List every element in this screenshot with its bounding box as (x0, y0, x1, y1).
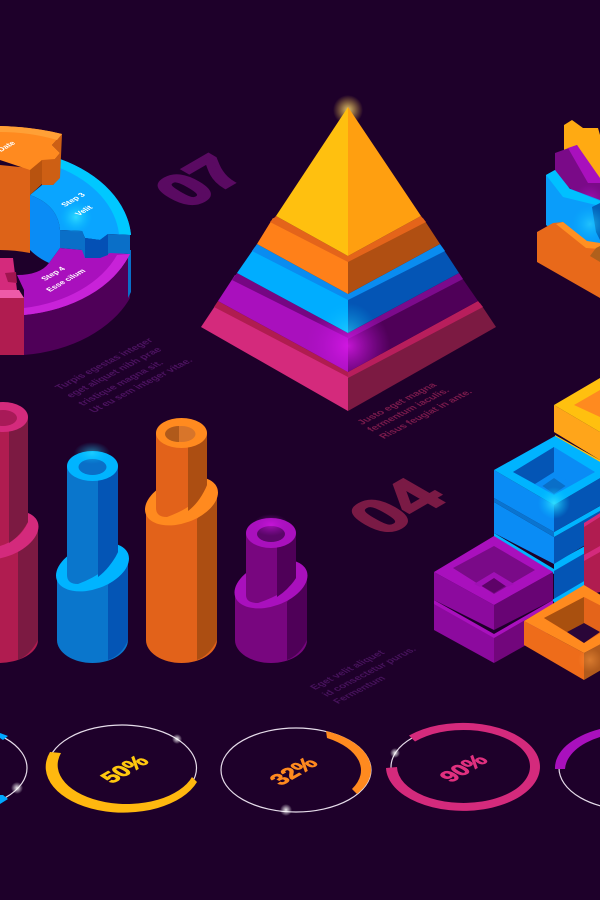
pyramid layer: purple (218, 273, 478, 372)
ring segment: orange top (0, 126, 62, 253)
caption: pyramid text: fermentum iaculis. (365, 387, 453, 434)
ring label: step 3: Velit (73, 204, 95, 217)
panel: percentage dials (0, 723, 600, 816)
pyramid layer: orange (257, 216, 440, 294)
ring segment: pink step 5 (0, 258, 24, 355)
ring label: step 4: Esse cilum (44, 268, 88, 293)
caption: cylinder text: id consectetur purus. (320, 646, 420, 699)
ring segment: blue step 3 (30, 159, 131, 263)
caption: ring chart text: Ut eu sem integer vitae. (87, 357, 196, 415)
ring segment: purple step 4 (17, 248, 131, 355)
glow: blue cylinder (74, 442, 110, 464)
glow: purple cylinder (253, 514, 289, 536)
block: purple top (434, 536, 553, 630)
caption: ring chart text: Turpis egestas integer (53, 337, 156, 392)
panel: pyramid chart (201, 95, 496, 411)
stepped block: orange (537, 222, 600, 298)
block: blue lower (494, 533, 586, 605)
ring label: step 3: Step 3 (59, 191, 88, 208)
block: blue middle (494, 498, 600, 564)
cylinder: pink (0, 402, 45, 663)
block: yellow (554, 378, 600, 470)
cylinder: blue (49, 442, 136, 663)
panel: cylinder bar chart (0, 402, 314, 663)
ring label: step 4: Step 4 (39, 265, 68, 282)
dial: 32 percent (221, 728, 371, 816)
caption: ring chart text: tristique magna sit. (76, 359, 167, 408)
block: pink side stack (584, 513, 600, 596)
caption: pyramid text: Risus feugiat in ante. (377, 388, 476, 441)
dial: partial blue (0, 726, 27, 810)
block: blue top (494, 436, 600, 532)
panel: isometric stacked blocks (434, 378, 600, 680)
value: 50 percent: 50% (95, 752, 154, 787)
ring label: step 3 (59, 191, 95, 217)
caption: ring chart text: eget aliquet nibh prae (64, 346, 165, 400)
dial: partial purple (555, 726, 600, 810)
stepped block: yellow (564, 120, 600, 180)
caption: ring chart text (53, 337, 196, 415)
value: 32 percent: 32% (264, 754, 323, 789)
cylinder: orange (138, 418, 225, 663)
caption: pyramid text: Justo eget magna (355, 381, 440, 427)
panel: segmented ring chart (0, 126, 131, 355)
glow: pyramid apex (333, 95, 363, 125)
pyramid layer: pink (201, 301, 496, 411)
cylinder: purple (228, 514, 314, 663)
pyramid layer: yellow top (276, 107, 421, 256)
big number 07: 07 (140, 147, 260, 216)
value: 90 percent: 90% (434, 751, 493, 786)
stepped block: blue (546, 170, 600, 270)
block: orange (524, 585, 600, 680)
big number 04: 04 (331, 469, 463, 545)
pyramid layer: blue (237, 244, 459, 333)
dial: 50 percent (46, 725, 197, 813)
dial: 90 percent (386, 723, 540, 811)
caption: cylinder text: Eget velit aliquet (308, 649, 388, 692)
caption: cylinder text: Fermentum (331, 675, 389, 706)
block: purple lower (434, 600, 553, 663)
stepped block: purple (555, 145, 600, 216)
panel: stepped blocks top right (537, 120, 600, 298)
